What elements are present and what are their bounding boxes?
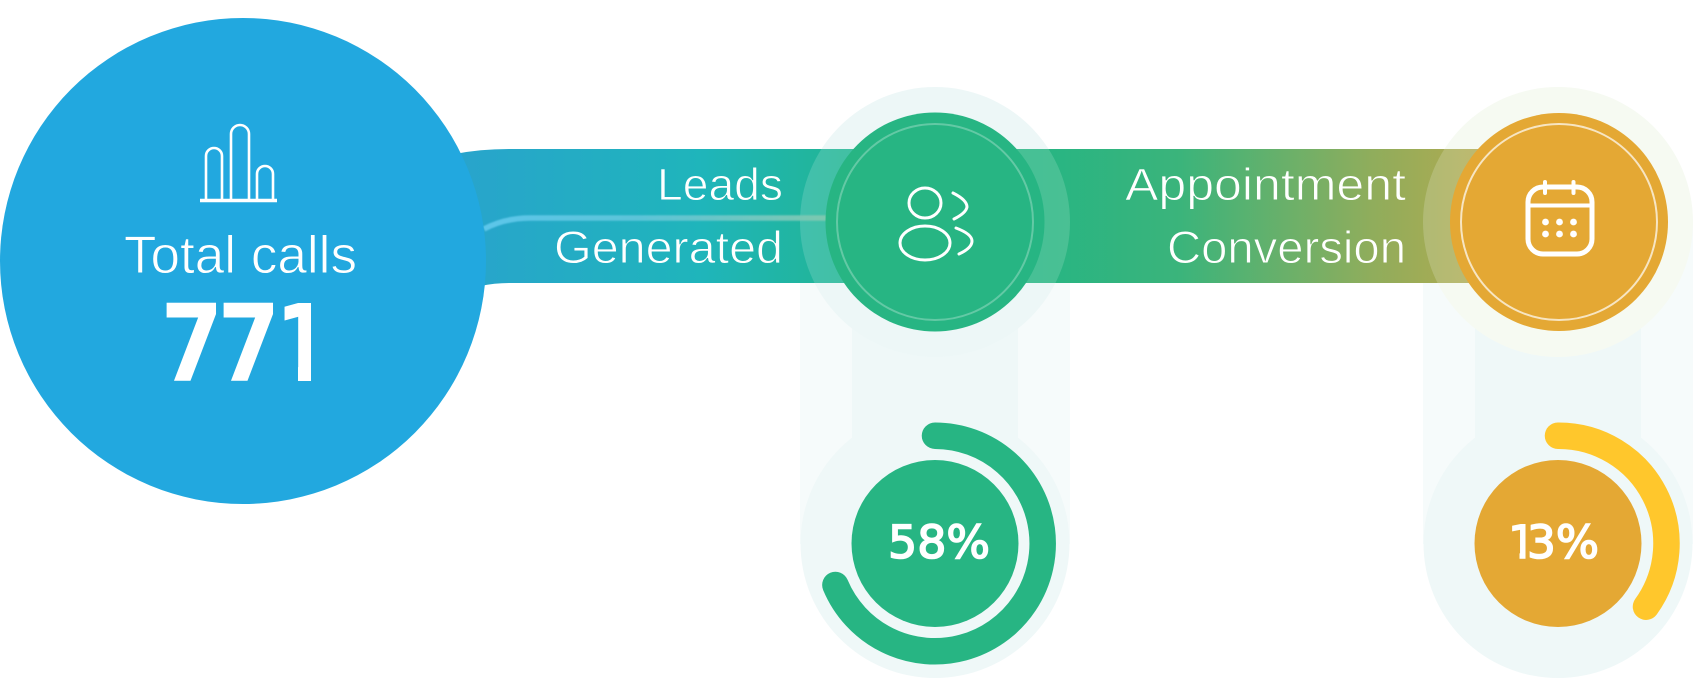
text: 13% <box>1512 523 1598 560</box>
label: Leads Generated: Leads <box>657 159 783 210</box>
number: 771: 7 <box>161 282 223 407</box>
halo: green top <box>800 87 1070 357</box>
label: Appointment Conversion <box>1125 159 1407 273</box>
icon: people <box>900 188 972 260</box>
label: Appointment Conversion: Appointment <box>1125 159 1407 210</box>
label: Leads Generated <box>554 159 783 273</box>
connector band: leads generated <box>455 149 940 286</box>
text: 13%: 1 <box>1508 516 1537 569</box>
icon: bar chart <box>200 125 277 200</box>
node: leads icon circle <box>826 112 1044 332</box>
panel: total calls circle <box>0 18 486 504</box>
progress: 58% <box>800 409 1070 678</box>
center line: leads <box>484 218 830 229</box>
halo overlay on bands <box>800 87 1693 357</box>
text: Total calls: Total calls <box>124 226 357 285</box>
text: 13%: 3% <box>1527 516 1599 569</box>
halo: orange top <box>1423 87 1693 357</box>
column: green lead track <box>800 222 1070 544</box>
number: 771: 1 <box>276 283 331 407</box>
number: 771 <box>166 302 311 381</box>
column: orange appointment track <box>1423 222 1693 544</box>
connector band: appointment conversion <box>1000 149 1500 283</box>
progress: 13% <box>1424 409 1692 678</box>
node: calendar icon circle <box>1450 113 1668 331</box>
icon: calendar <box>1528 182 1592 254</box>
label: Leads Generated: Generated <box>554 222 783 273</box>
center line: appointment <box>1045 216 1455 221</box>
text: 58%: 58% <box>888 516 990 569</box>
number: 771: 7 <box>218 282 280 407</box>
label: Appointment Conversion: Conversion <box>1167 222 1406 273</box>
